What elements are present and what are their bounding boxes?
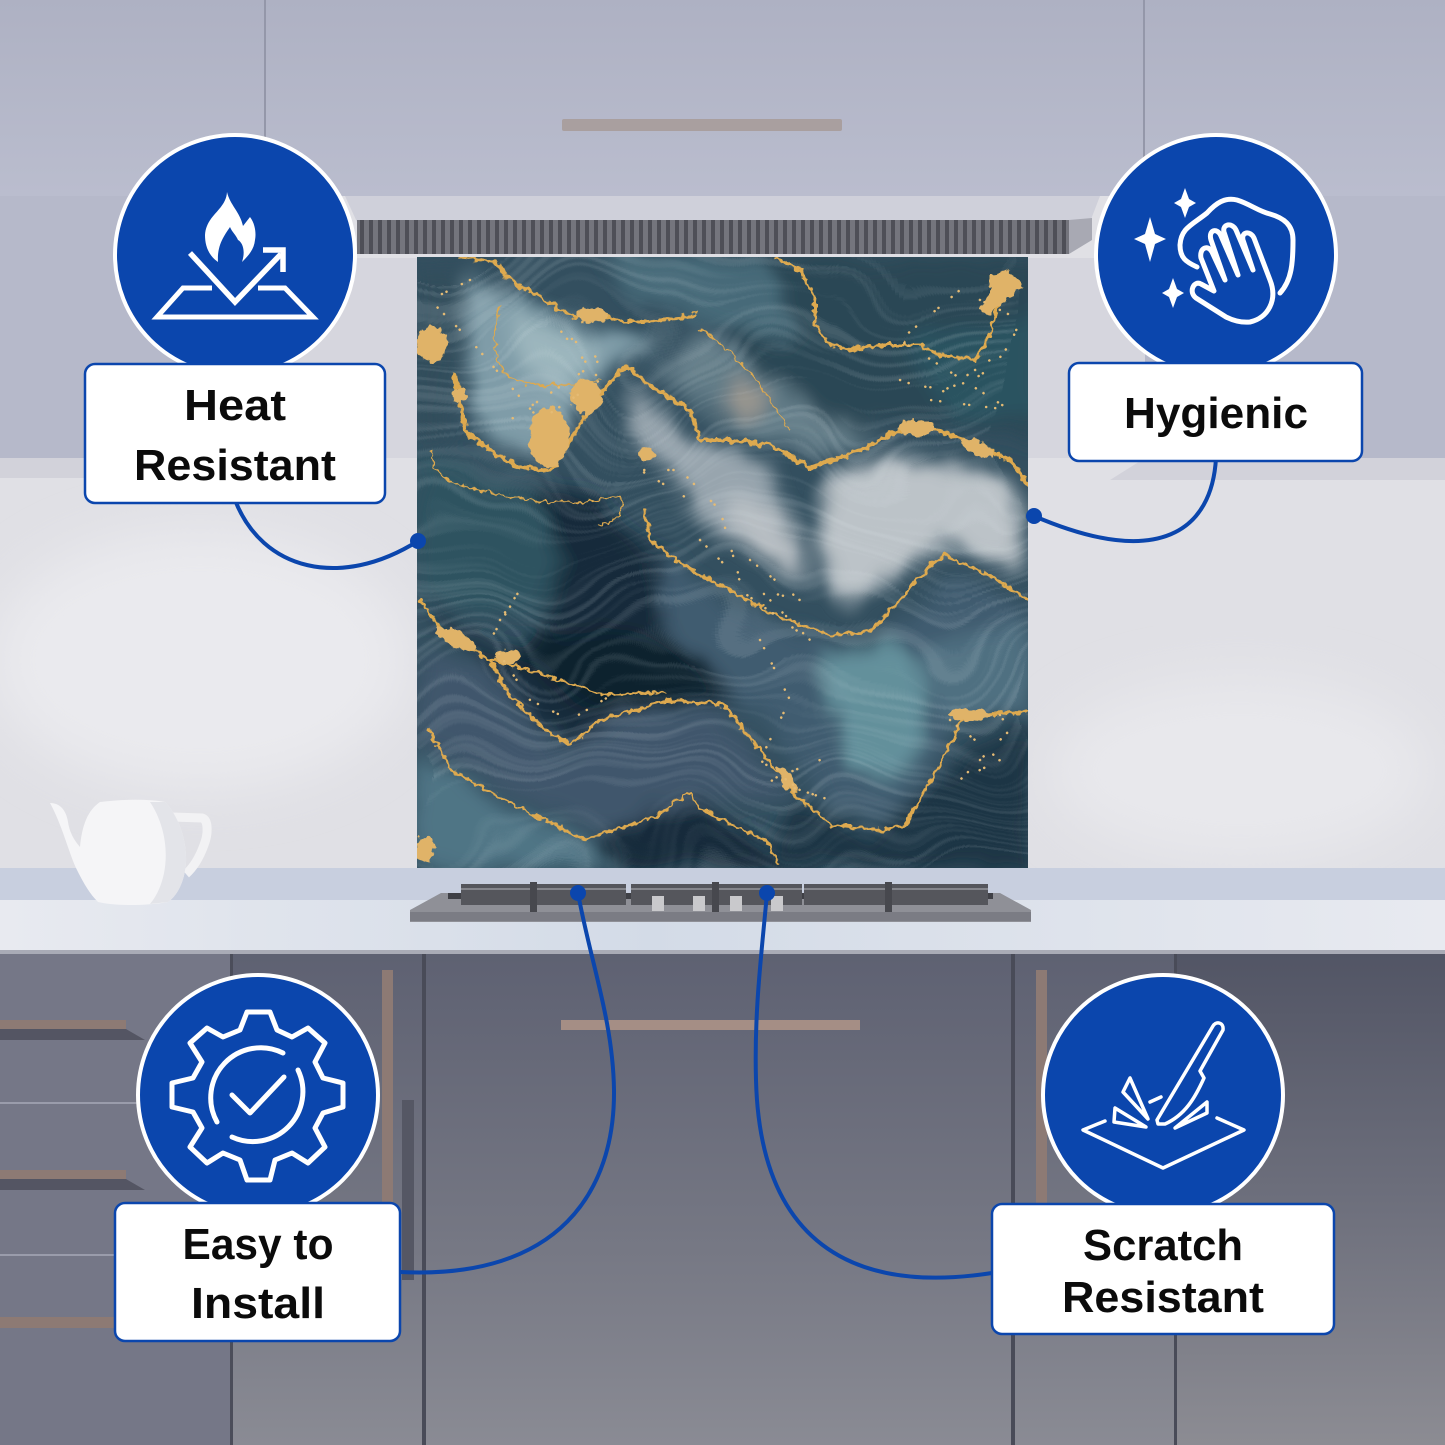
lower cabinets — [0, 954, 1445, 1445]
teapot — [50, 800, 207, 905]
label: scratch resistant: Resistant — [1062, 1273, 1264, 1322]
connector: easy to install — [400, 885, 614, 1272]
connector: heat resistant — [235, 500, 426, 568]
icon: gear with check — [172, 1012, 343, 1180]
connector: hygienic — [1026, 458, 1216, 541]
label: scratch resistant — [992, 1204, 1334, 1334]
cooktop — [410, 882, 1031, 922]
extractor hood — [345, 196, 1100, 254]
marble banding texture — [417, 257, 1028, 868]
label: easy to install — [115, 1203, 400, 1341]
icon: blade scratching surface — [1083, 1023, 1244, 1168]
gold clusters — [416, 270, 1024, 863]
label: easy to install: Easy to — [182, 1220, 334, 1269]
label: hygienic: Hygienic — [1124, 389, 1308, 438]
label: heat resistant: Resistant — [134, 441, 336, 490]
label: easy to install: Install — [191, 1279, 325, 1328]
gold veins — [420, 258, 1028, 865]
label: hygienic — [1069, 363, 1362, 461]
marble splashback panel — [416, 250, 1040, 868]
upper cabinets — [0, 0, 1445, 480]
countertop — [0, 868, 1445, 954]
badge: hygienic — [1096, 135, 1336, 375]
badge: easy to install — [138, 975, 378, 1215]
label: heat resistant: Heat — [184, 381, 286, 430]
icon: wiping hand with sparkles — [1134, 188, 1293, 322]
label: heat resistant — [85, 364, 385, 503]
marble tonal areas — [417, 250, 1040, 868]
gold speckles — [430, 280, 1020, 800]
badge: scratch resistant — [1043, 975, 1283, 1215]
icon: flame over surface — [157, 192, 313, 317]
connector: scratch resistant — [756, 885, 992, 1278]
label: scratch resistant: Scratch — [1083, 1221, 1243, 1270]
wall light — [0, 530, 410, 790]
badge: heat resistant — [115, 135, 355, 375]
